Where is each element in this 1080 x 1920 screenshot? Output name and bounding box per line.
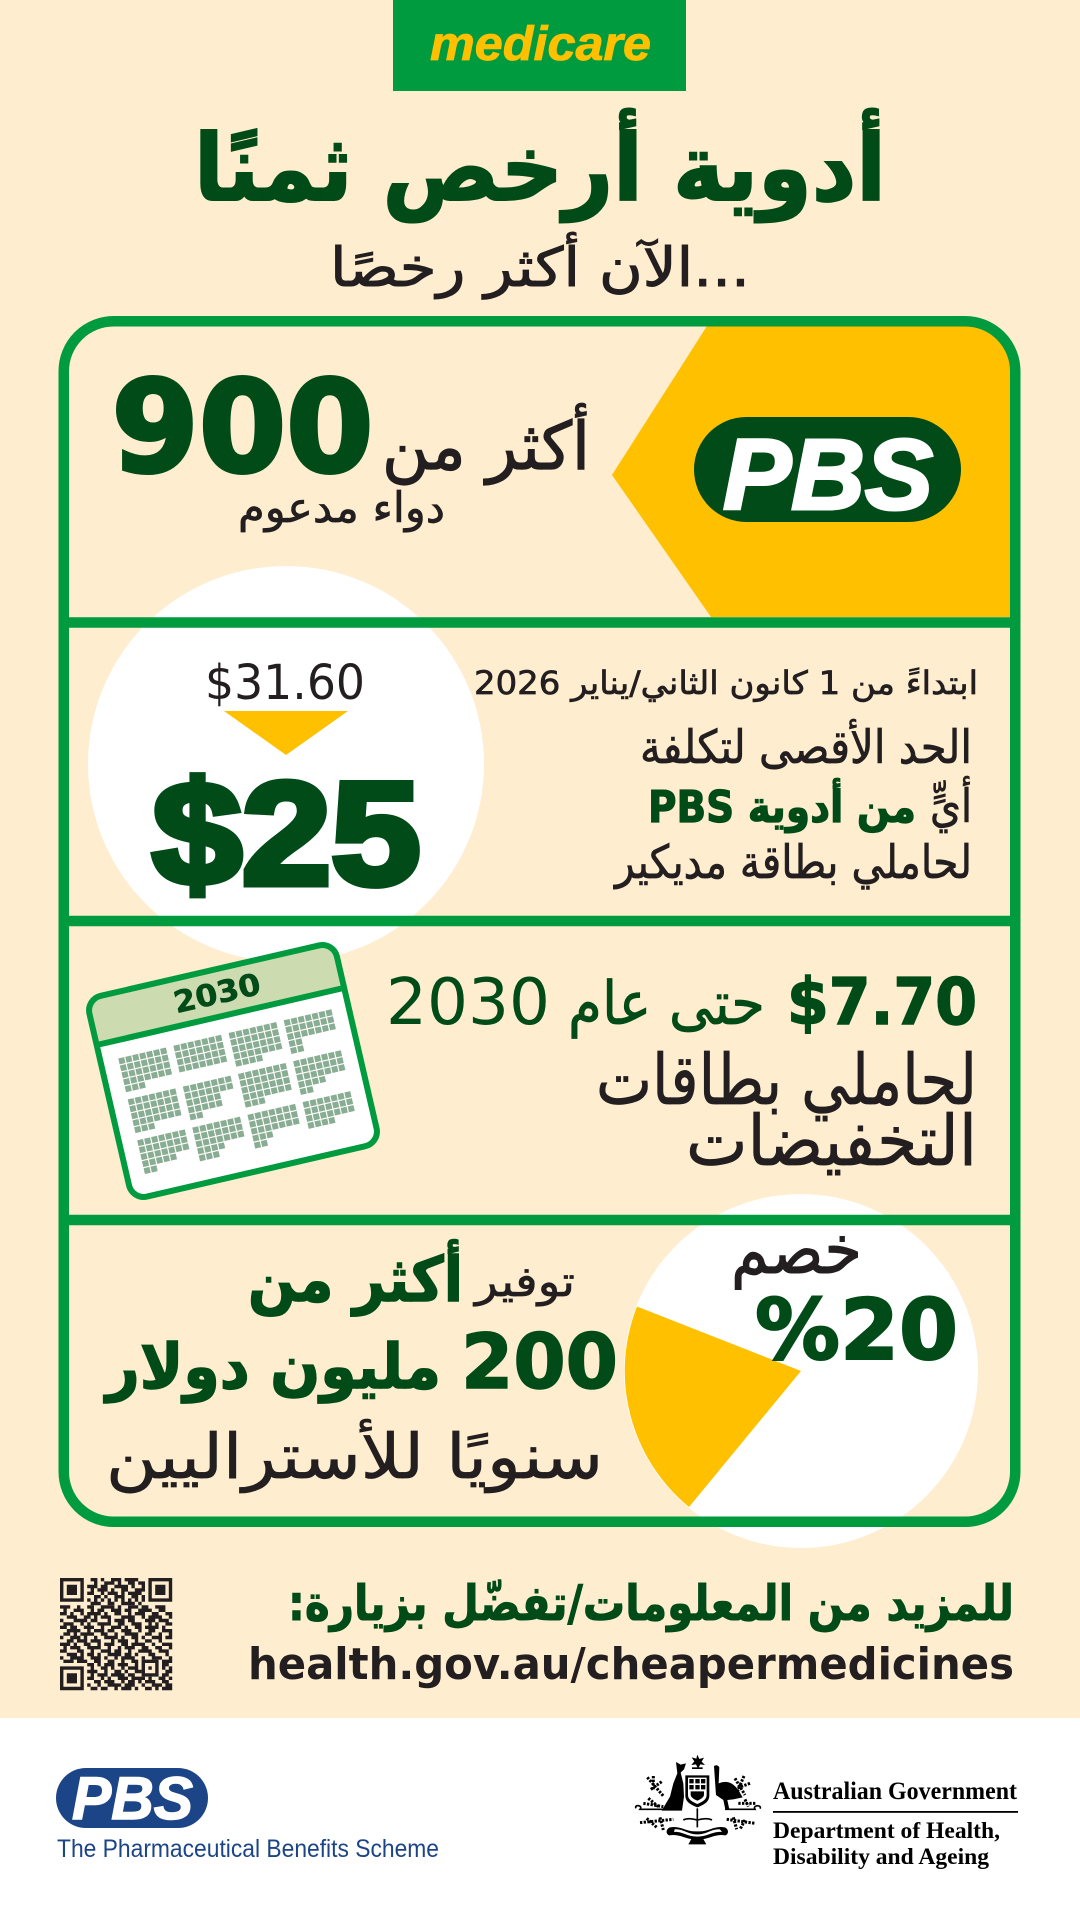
yellow PBS arrow panel bbox=[612, 326, 1011, 617]
icon: 2030 calendar: 2030 bbox=[170, 967, 264, 1021]
Australian Government wordmark bbox=[773, 1778, 1018, 1869]
panel: 20 percent discount and savings bbox=[103, 1211, 958, 1493]
icon: 2030 calendar bbox=[86, 942, 380, 1200]
PBS scheme logo bbox=[56, 1765, 439, 1863]
white circle behind $25 bbox=[88, 566, 484, 962]
more than: أكثر من bbox=[382, 403, 590, 485]
concession line 1: لحاملي بطاقات bbox=[596, 1039, 977, 1122]
subtitle: ...الآن أكثر رخصًا bbox=[330, 232, 750, 299]
PBS badge: PBS bbox=[723, 419, 933, 531]
Australian Government wordmark: Disability and Ageing bbox=[773, 1844, 990, 1869]
annually for Australians: سنويًا للأستراليين bbox=[106, 1418, 603, 1493]
subsidised medicines label: دواء مدعوم bbox=[238, 483, 445, 532]
medicare logo: medicare bbox=[430, 18, 651, 71]
icon: Australian coat of arms bbox=[636, 1755, 760, 1844]
footer band bbox=[0, 1718, 1080, 1920]
discount word: خصم bbox=[731, 1211, 862, 1290]
main green frame with dividers bbox=[64, 321, 1016, 1522]
until year: حتى عام bbox=[568, 969, 765, 1039]
savings word: توفير bbox=[473, 1257, 575, 1306]
Australian Government wordmark: Department of Health, bbox=[773, 1818, 1000, 1843]
panel: $25 maximum cost bbox=[152, 655, 978, 915]
number 900: 900 bbox=[112, 353, 374, 501]
white pie circle bbox=[624, 1194, 978, 1548]
year 2030: 2030 bbox=[386, 966, 550, 1040]
old price: $31.60 bbox=[205, 655, 365, 711]
PBS scheme logo: The Pharmaceutical Benefits Scheme bbox=[57, 1835, 439, 1863]
description line 1: الحد الأقصى لتكلفة bbox=[640, 718, 972, 774]
concession line 2: التخفيضات bbox=[686, 1100, 977, 1182]
pie slice 20 percent bbox=[625, 1306, 801, 1507]
date line: ابتداءً من 1 كانون الثاني/يناير 2026 bbox=[474, 664, 978, 702]
QR code bbox=[60, 1578, 172, 1690]
discount 20 percent: %20 bbox=[755, 1281, 958, 1379]
title: أدوية أرخص ثمنًا bbox=[194, 108, 886, 223]
panel: 900 subsidised medicines bbox=[112, 353, 961, 532]
more than bold: أكثر من bbox=[248, 1239, 463, 1316]
description line 2: أيٍّ bbox=[930, 776, 972, 833]
medicare logo bbox=[393, 0, 686, 91]
number 200: 200 bbox=[461, 1317, 618, 1406]
down arrow bbox=[224, 711, 348, 755]
panel: $7.70 until 2030 bbox=[86, 942, 977, 1200]
new price: $25 bbox=[152, 752, 420, 915]
PBS scheme logo: PBS bbox=[72, 1765, 193, 1832]
million dollars: مليون دولار bbox=[103, 1330, 441, 1403]
description line 2: من أدوية PBS bbox=[648, 778, 916, 833]
price 7.70: $7.70 bbox=[787, 966, 977, 1040]
website address: health.gov.au/cheapermedicines bbox=[248, 1639, 1014, 1690]
description line 3: لحاملي بطاقة مديكير bbox=[613, 835, 972, 890]
Australian Government wordmark: Australian Government bbox=[773, 1778, 1018, 1805]
